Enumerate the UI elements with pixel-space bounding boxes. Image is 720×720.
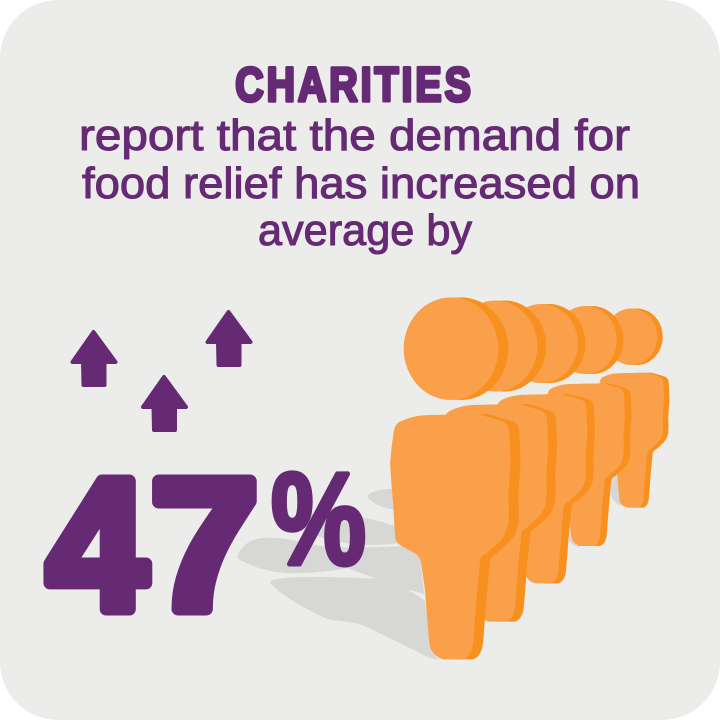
percent sign: % (271, 445, 366, 592)
number 7: 7 (150, 442, 258, 649)
title (79, 58, 640, 255)
number 4: 4 (47, 442, 147, 649)
text block: description: report that the demand for (79, 111, 630, 160)
person 4 (545, 306, 632, 546)
text block: description: food relief has increased on (82, 159, 640, 208)
person 1 (nearest) (390, 297, 521, 659)
big number 47% (47, 442, 366, 649)
person 3 (494, 304, 595, 583)
icon: arrow left (72, 332, 116, 385)
person 2 (441, 301, 557, 622)
icon: arrow middle (143, 377, 186, 430)
row of five people (390, 297, 669, 659)
heading: charities: CHARITIES (235, 58, 474, 112)
text block: description: average by (258, 206, 472, 255)
icon: three up arrows (72, 312, 250, 430)
shadows of the people (237, 470, 622, 659)
person 5 (furthest) (598, 308, 669, 508)
icon: arrow right (208, 312, 250, 365)
text block: description (79, 111, 640, 255)
